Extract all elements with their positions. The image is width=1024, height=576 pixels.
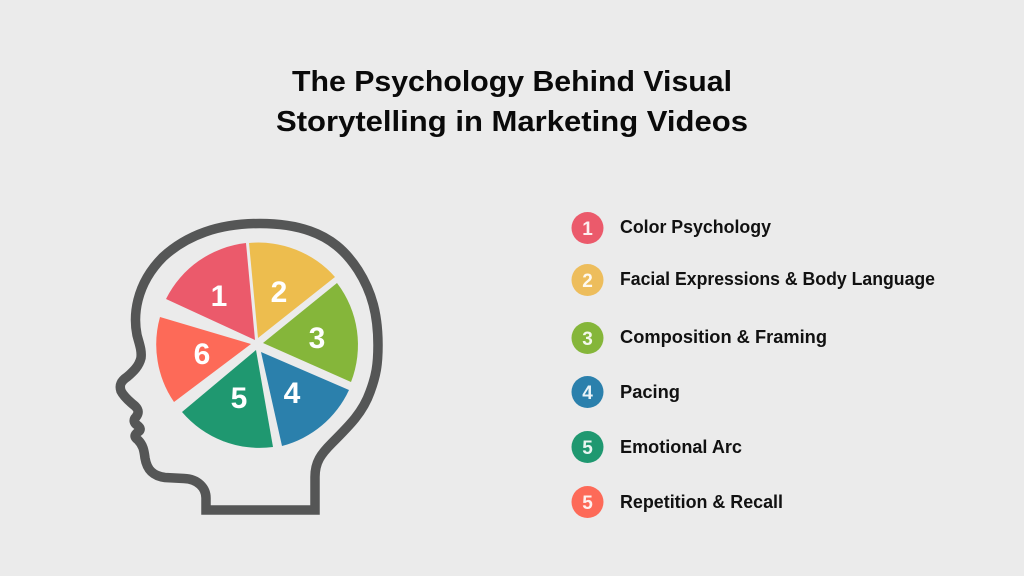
wedge 5: 5 bbox=[231, 382, 247, 415]
wedge 3: 3 bbox=[309, 322, 325, 355]
legend item 3 bbox=[572, 322, 827, 354]
wedge 4 bbox=[261, 352, 349, 446]
wedge 2 bbox=[249, 243, 335, 338]
legend item 6: Repetition & Recall bbox=[620, 492, 783, 512]
legend item 2: 2 bbox=[582, 271, 593, 292]
legend item 3: 3 bbox=[582, 329, 593, 350]
legend item 3: Composition & Framing bbox=[620, 327, 827, 347]
legend item 1: Color Psychology bbox=[620, 217, 771, 237]
wedge 5 bbox=[182, 350, 273, 448]
wedge 1 bbox=[166, 243, 255, 340]
wedge 1: 1 bbox=[211, 280, 227, 313]
legend item 4 bbox=[572, 376, 680, 408]
legend item 4: 4 bbox=[582, 383, 593, 404]
legend item 5: 5 bbox=[582, 438, 593, 459]
title: Storytelling in Marketing Videos bbox=[276, 106, 748, 138]
wedge 6: 6 bbox=[194, 338, 210, 371]
wedge 4: 4 bbox=[284, 377, 301, 410]
legend item 5 bbox=[572, 431, 742, 463]
head outline bbox=[120, 224, 378, 510]
legend item 6: 5 bbox=[582, 493, 593, 514]
legend item 5: Emotional Arc bbox=[620, 437, 742, 457]
icon: head profile with pie brain bbox=[120, 224, 378, 510]
legend bbox=[572, 212, 935, 518]
wedge 3 bbox=[263, 283, 358, 382]
legend item 1 bbox=[572, 212, 771, 244]
legend item 4: Pacing bbox=[620, 382, 680, 402]
legend item 2 bbox=[572, 264, 935, 296]
legend item 2: Facial Expressions & Body Language bbox=[620, 269, 935, 289]
title bbox=[276, 66, 748, 138]
title: The Psychology Behind Visual bbox=[292, 66, 732, 98]
legend item 6 bbox=[572, 486, 783, 518]
wedge 6 bbox=[156, 317, 251, 402]
wedge 2: 2 bbox=[271, 276, 287, 309]
legend item 1: 1 bbox=[582, 219, 593, 240]
